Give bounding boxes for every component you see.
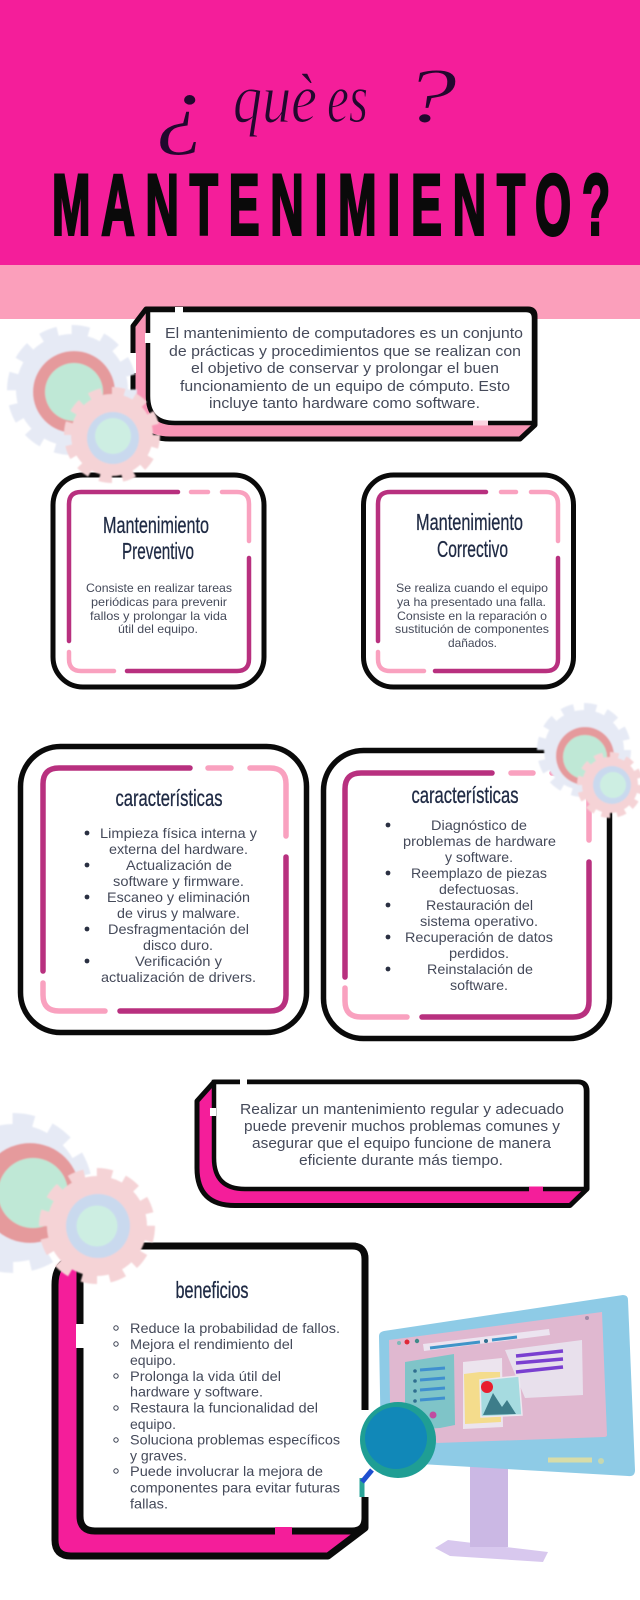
panel: mantenimiento correctivo <box>364 475 574 687</box>
body text: útil del equipo. <box>118 622 198 636</box>
panel: mantenimiento preventivo <box>53 475 264 687</box>
bullet list: software. <box>450 977 508 993</box>
note text: asegurar que el equipo funcione de manera <box>252 1136 552 1152</box>
bullet list: Puede involucrar la mejora de <box>130 1463 323 1479</box>
heading <box>103 512 209 564</box>
bullet list: Soluciona problemas específicos <box>130 1432 340 1448</box>
bullet list: Diagnóstico de <box>431 817 527 833</box>
panel: características correctivo <box>324 750 610 1038</box>
heading: Mantenimiento <box>103 512 209 538</box>
body text <box>395 581 549 650</box>
bullet list: actualización de drivers. <box>101 969 256 985</box>
bullet list: software y firmware. <box>113 873 244 889</box>
magnifier <box>360 1402 436 1497</box>
bullet list <box>85 825 257 985</box>
illustration: monitor with magnifier <box>360 1295 635 1562</box>
body text: Consiste en realizar tareas <box>86 581 232 595</box>
script heading: ¿ què es ?: ¿ <box>155 58 208 157</box>
bullet list: Restauración del <box>426 897 533 913</box>
intro text: funcionamiento de un equipo de cómputo. Esto <box>180 379 510 395</box>
heading: características <box>412 782 518 808</box>
bullet list <box>386 817 556 993</box>
bullet list: Mejora el rendimiento del <box>130 1336 293 1352</box>
bullet list: Prolonga la vida útil del <box>130 1368 281 1384</box>
bullet list: equipo. <box>130 1352 176 1368</box>
bullet list: Recuperación de datos <box>405 929 553 945</box>
body text: fallos y prolongar la vida <box>90 609 227 623</box>
bullet list: Restaura la funcionalidad del <box>130 1400 318 1416</box>
intro text: el objetivo de conservar y prolongar el buen <box>191 361 499 377</box>
bullet list: Actualización de <box>126 857 232 873</box>
note text <box>240 1102 564 1169</box>
bullet list: y software. <box>445 849 513 865</box>
bullet list: externa del hardware. <box>109 841 248 857</box>
heading: beneficios <box>176 1277 248 1303</box>
bullet list: equipo. <box>130 1416 176 1432</box>
panel: características preventivo <box>20 746 306 1032</box>
bullet list: fallas. <box>130 1496 168 1512</box>
bullet list: de virus y malware. <box>117 905 240 921</box>
monitor stand <box>435 1465 548 1562</box>
heading: Mantenimiento <box>416 509 523 535</box>
intro text: incluye tanto hardware como software. <box>209 396 480 412</box>
body text: periódicas para prevenir <box>91 595 227 609</box>
icon: gears top left <box>13 331 156 479</box>
body text: dañados. <box>448 636 497 650</box>
intro text: de prácticas y procedimientos que se realizan con <box>169 344 521 360</box>
panel: intro <box>133 309 535 439</box>
intro text <box>165 326 523 412</box>
icon: gears bottom left <box>0 1120 150 1279</box>
icon: gears top right <box>541 707 640 815</box>
bullet list: Reemplazo de piezas <box>411 865 547 881</box>
heading: Correctivo <box>437 536 508 562</box>
script heading: ¿ què es ?: què <box>233 61 317 138</box>
bullet list: y graves. <box>130 1448 187 1464</box>
bullet list: perdidos. <box>449 945 509 961</box>
bullet list: Limpieza física interna y <box>100 825 257 841</box>
bullet list: Escaneo y eliminación <box>107 889 250 905</box>
bullet list: Verificación y <box>135 953 222 969</box>
bullet list: disco duro. <box>143 937 213 953</box>
bullet list: hardware y software. <box>130 1384 263 1400</box>
bullet list: Desfragmentación del <box>108 921 249 937</box>
body text <box>86 581 232 636</box>
bullet list: componentes para evitar futuras <box>130 1480 340 1496</box>
bullet list: defectuosas. <box>439 881 519 897</box>
panel: beneficios <box>55 1246 365 1556</box>
script heading: ¿ què es ?: es <box>327 61 368 138</box>
note text: eficiente durante más tiempo. <box>299 1153 503 1169</box>
body text: Consiste en la reparación o <box>397 609 547 623</box>
header band <box>0 0 640 319</box>
bullet list: Reinstalación de <box>427 961 533 977</box>
panel: closing note <box>197 1082 587 1206</box>
body text: Se realiza cuando el equipo <box>396 581 548 595</box>
note text: puede prevenir muchos problemas comunes y <box>244 1119 561 1135</box>
body text: ya ha presentado una falla. <box>397 595 546 609</box>
heading <box>416 509 523 562</box>
script heading: ¿ què es ?: ? <box>402 52 457 139</box>
bullet list <box>114 1320 340 1512</box>
bullet list: Reduce la probabilidad de fallos. <box>130 1320 340 1336</box>
script heading: ¿ què es ? <box>155 52 457 157</box>
intro text: El mantenimiento de computadores es un conjunto <box>165 326 523 342</box>
monitor screen <box>379 1295 635 1476</box>
bullet list: problemas de hardware <box>403 833 556 849</box>
main title: MANTENIMIENTO? <box>52 156 610 253</box>
body text: sustitución de componentes <box>395 622 549 636</box>
bullet list: sistema operativo. <box>420 913 538 929</box>
note text: Realizar un mantenimiento regular y adecuado <box>240 1102 564 1118</box>
heading: Preventivo <box>122 538 194 564</box>
heading: características <box>116 785 222 811</box>
